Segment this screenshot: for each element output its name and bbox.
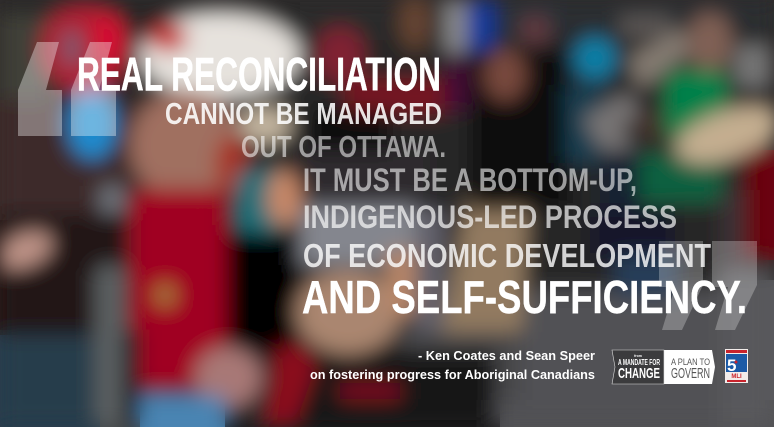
logo: MLI 5th anniversary [725,349,748,383]
quote text [77,48,747,323]
hat and face [140,13,300,97]
quote text: IT MUST BE A BOTTOM-UP, [303,162,637,198]
black jacket and teal [226,225,300,355]
quote text: INDIGENOUS-LED PROCESS [303,199,677,235]
logo: A Mandate for Change / A Plan to Govern: CHANGE [618,365,660,382]
attribution [310,348,595,382]
head lower [296,270,400,354]
upper middle crowd [300,0,390,40]
attribution: on fostering progress for Aboriginal Canadians [310,367,595,382]
quote text: REAL RECONCILIATION [77,48,441,100]
logo: A Mandate for Change / A Plan to Govern [612,350,715,384]
logo: A Mandate for Change / A Plan to Govern: A PLAN TO [671,357,710,367]
tan column [442,145,555,332]
logo: MLI 5th anniversary: 5 [727,356,736,375]
red shirt [130,188,226,388]
quote text: CANNOT BE MANAGED [165,96,442,131]
dark blue patch [590,210,675,260]
attribution: - Ken Coates and Sean Speer [418,348,595,363]
left body [0,213,125,335]
closing quotation mark [659,241,757,330]
logo: MLI 5th anniversary: MLI [731,374,742,380]
logo: A Mandate for Change / A Plan to Govern: A MANDATE FOR [618,358,660,367]
floor [480,290,774,427]
quote text: OUT OF OTTAWA. [241,129,446,164]
logo: A Mandate for Change / A Plan to Govern: from [634,354,642,358]
dark figure bottom [270,350,495,427]
fist and blue cuff [195,347,261,407]
logo: A Mandate for Change / A Plan to Govern: GOVERN [671,365,710,382]
red hoodie and blue [41,4,129,92]
opening quotation mark [18,42,116,136]
